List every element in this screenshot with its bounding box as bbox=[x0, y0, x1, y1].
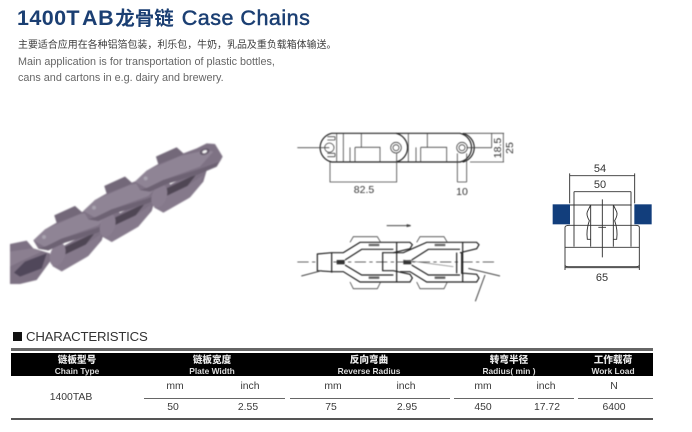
top view dimension drawing: 10 bbox=[456, 186, 468, 198]
units row: mm bbox=[166, 381, 184, 392]
blue guide rail left bbox=[553, 204, 570, 224]
header: reverse radius bbox=[338, 354, 400, 376]
blue guide rail right bbox=[634, 204, 652, 224]
side view dimension drawing: 54 bbox=[594, 163, 606, 175]
values row: 450 bbox=[474, 402, 492, 413]
header: chain type: 链板型号 bbox=[58, 354, 96, 366]
description in English: cans and cartons in e.g. dairy and brewery. bbox=[18, 72, 224, 84]
table bbox=[11, 348, 653, 420]
description in English bbox=[18, 56, 275, 84]
values row: 2.95 bbox=[397, 402, 417, 413]
top view dimension drawing: 25 bbox=[504, 142, 516, 154]
table bottom rule bbox=[11, 418, 653, 420]
units row: mm bbox=[474, 381, 492, 392]
header: plate width bbox=[189, 354, 235, 376]
header: radius bbox=[482, 354, 536, 376]
table top rule bbox=[11, 348, 653, 350]
units row: inch bbox=[396, 381, 416, 392]
description in Chinese: 主要适合应用在各种铝箔包装，利乐包，牛奶，乳品及重负载箱体输送。 bbox=[18, 40, 336, 51]
values row: 75 bbox=[325, 402, 337, 413]
values row: 17.72 bbox=[534, 402, 560, 413]
top view dimension drawing: 82.5 bbox=[354, 184, 374, 196]
header: plate width: Plate Width bbox=[189, 366, 235, 376]
units row bbox=[166, 381, 618, 392]
header: chain type: Chain Type bbox=[55, 366, 99, 376]
side view dimension drawing: 65 bbox=[596, 272, 608, 284]
chain link segments bbox=[10, 143, 223, 284]
section heading: CHARACTERISTICS bbox=[26, 329, 148, 344]
header: reverse radius: 反向弯曲 bbox=[350, 354, 388, 366]
header: plate width: 链板宽度 bbox=[193, 354, 231, 366]
header: work load: Work Load bbox=[591, 366, 635, 376]
header: radius: Radius( min ) bbox=[482, 366, 536, 376]
chain type value: 1400TAB bbox=[50, 392, 92, 402]
values row: 6400 bbox=[602, 402, 626, 413]
header: work load: 工作载荷 bbox=[594, 354, 632, 366]
side view dimension drawing: 50 bbox=[594, 179, 606, 191]
header: radius: 转弯半径 bbox=[490, 354, 528, 366]
values row: 50 bbox=[167, 402, 179, 413]
top view dimension drawing: 18.5 bbox=[492, 138, 504, 158]
header: chain type bbox=[55, 354, 99, 376]
values row: 2.55 bbox=[238, 402, 258, 413]
values row bbox=[167, 402, 626, 413]
table header row bbox=[11, 353, 653, 376]
units row: mm bbox=[324, 381, 342, 392]
header: reverse radius: Reverse Radius bbox=[338, 366, 400, 376]
row dividers bbox=[144, 398, 653, 399]
header: work load bbox=[591, 354, 635, 376]
description in English: Main application is for transportation of plastic bottles, bbox=[18, 56, 275, 68]
units row: N bbox=[610, 381, 618, 392]
units row: inch bbox=[240, 381, 260, 392]
title: 1400TAB龙骨链 Case Chains bbox=[17, 6, 310, 30]
units row: inch bbox=[536, 381, 556, 392]
